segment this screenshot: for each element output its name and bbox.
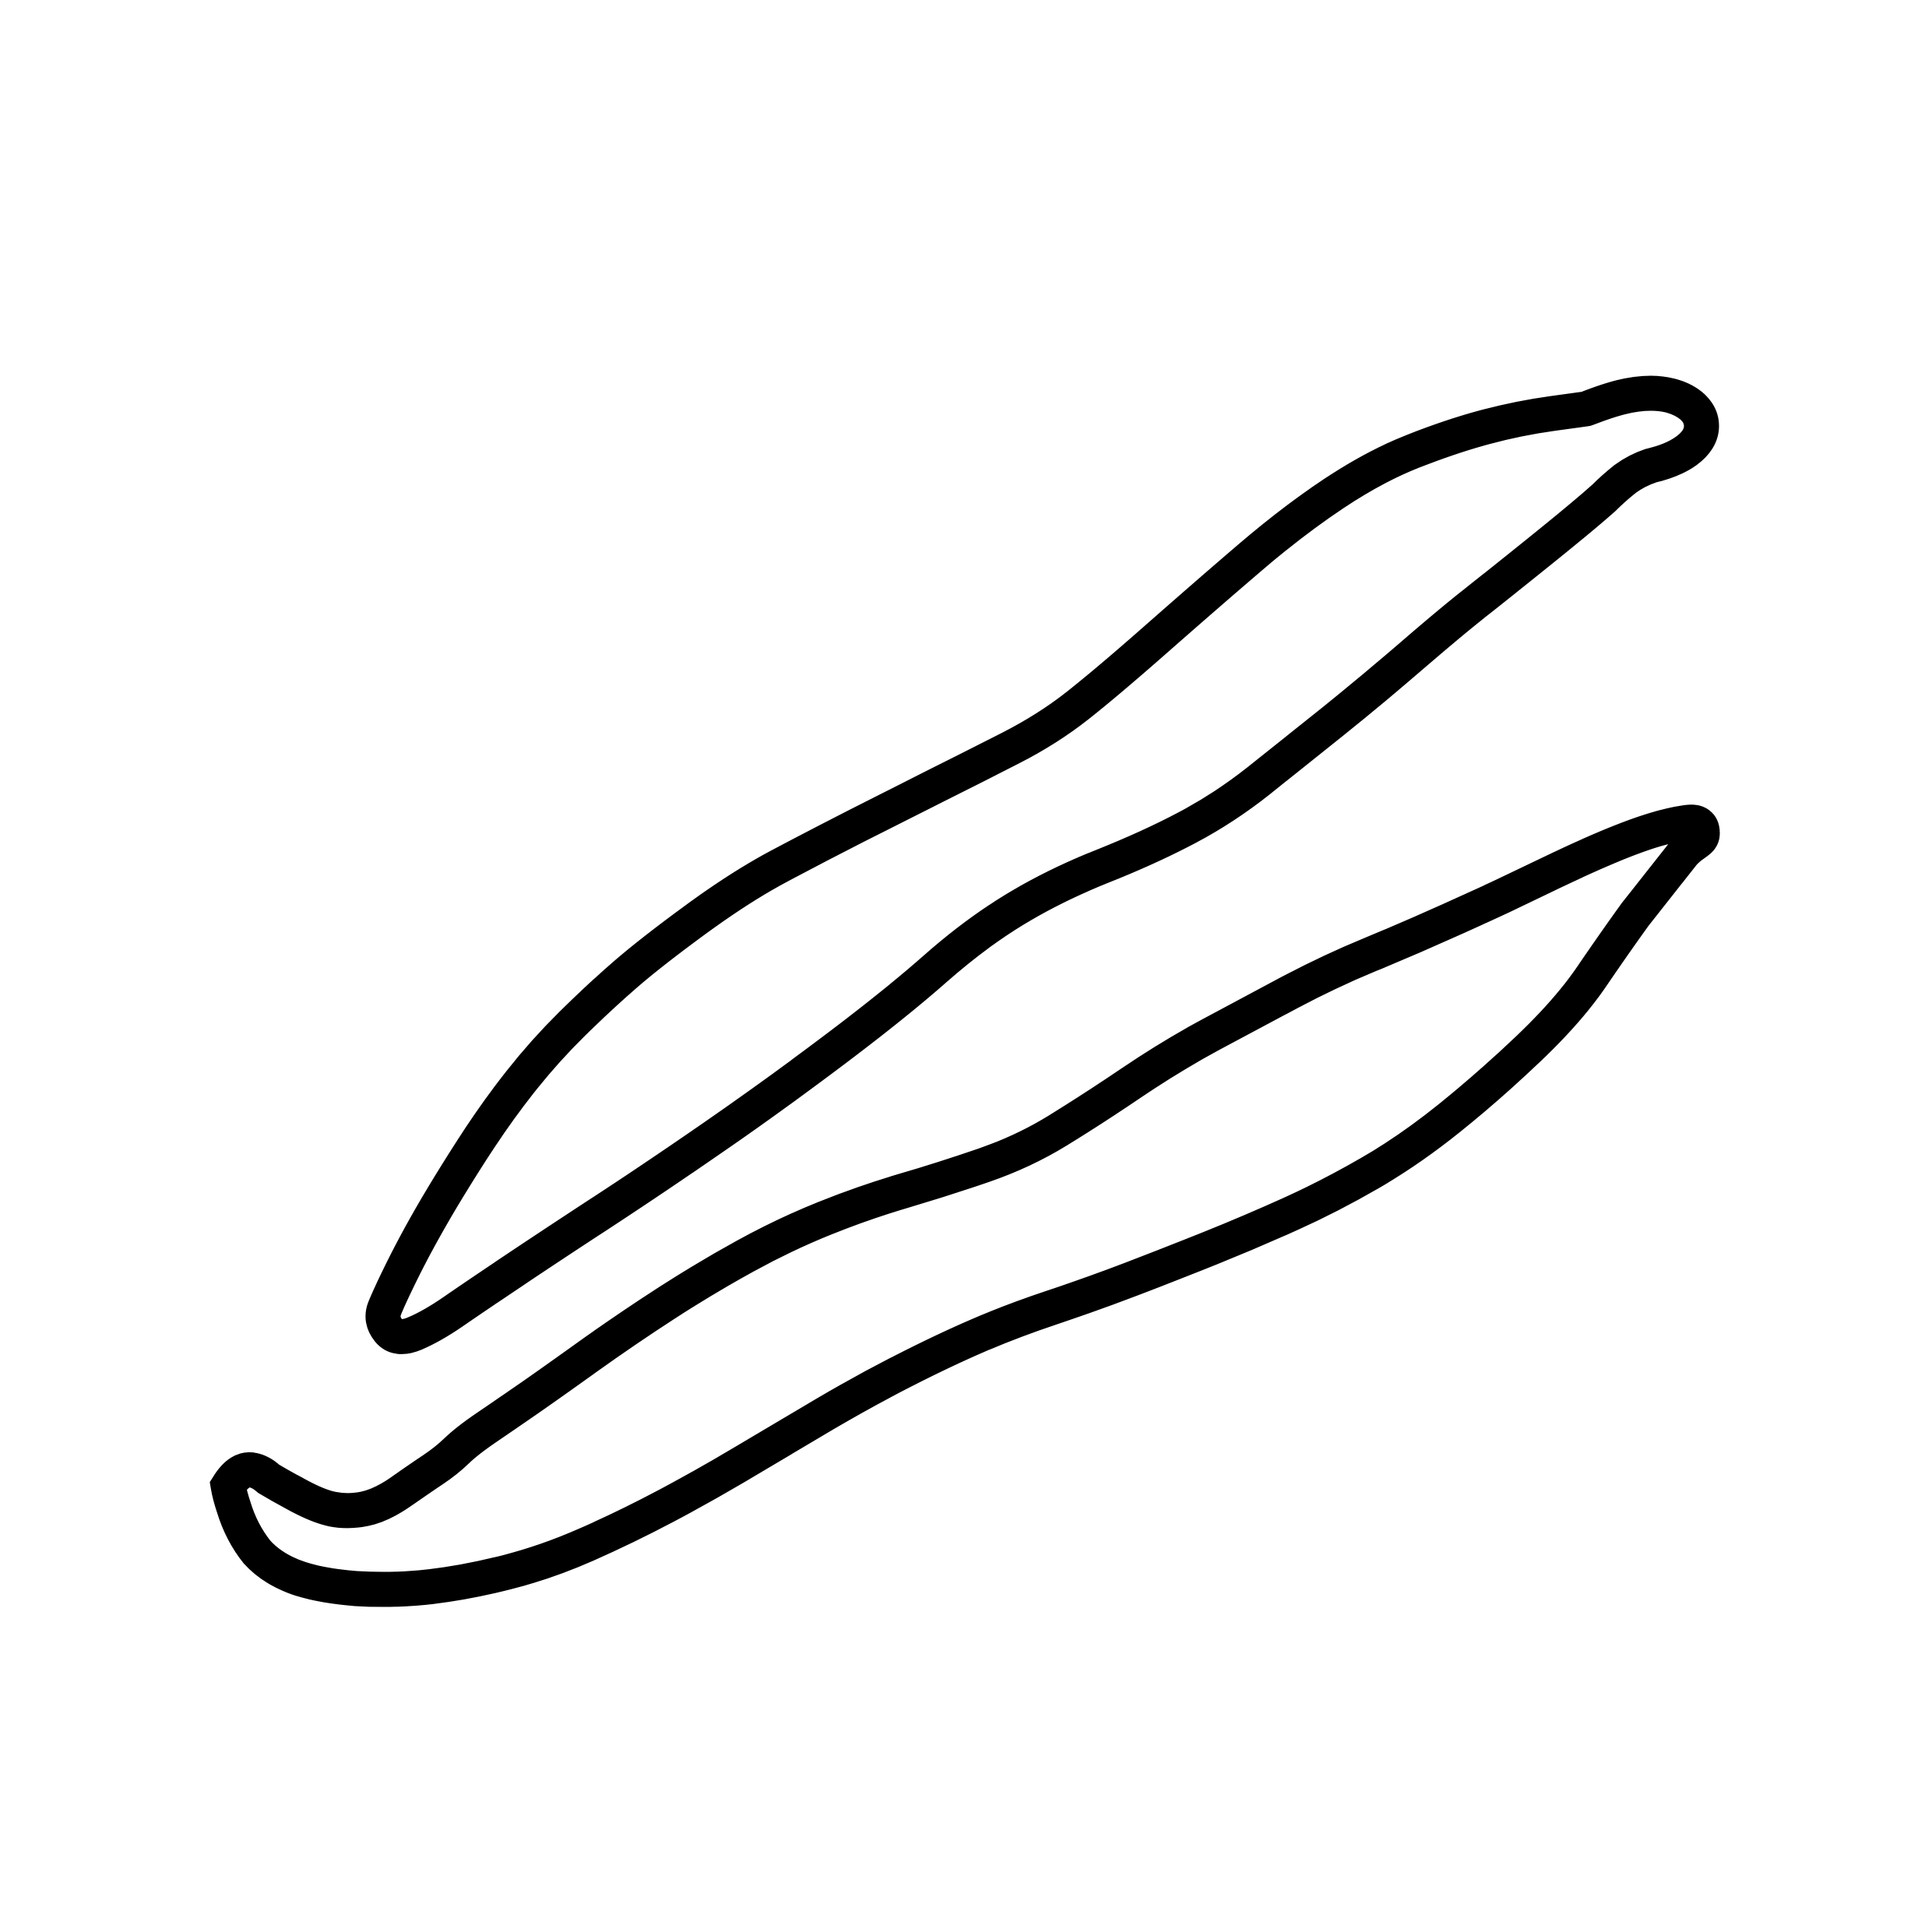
icon: lower leaf outline: [228, 822, 1702, 1589]
icon: upper leaf outline: [383, 393, 1701, 1336]
